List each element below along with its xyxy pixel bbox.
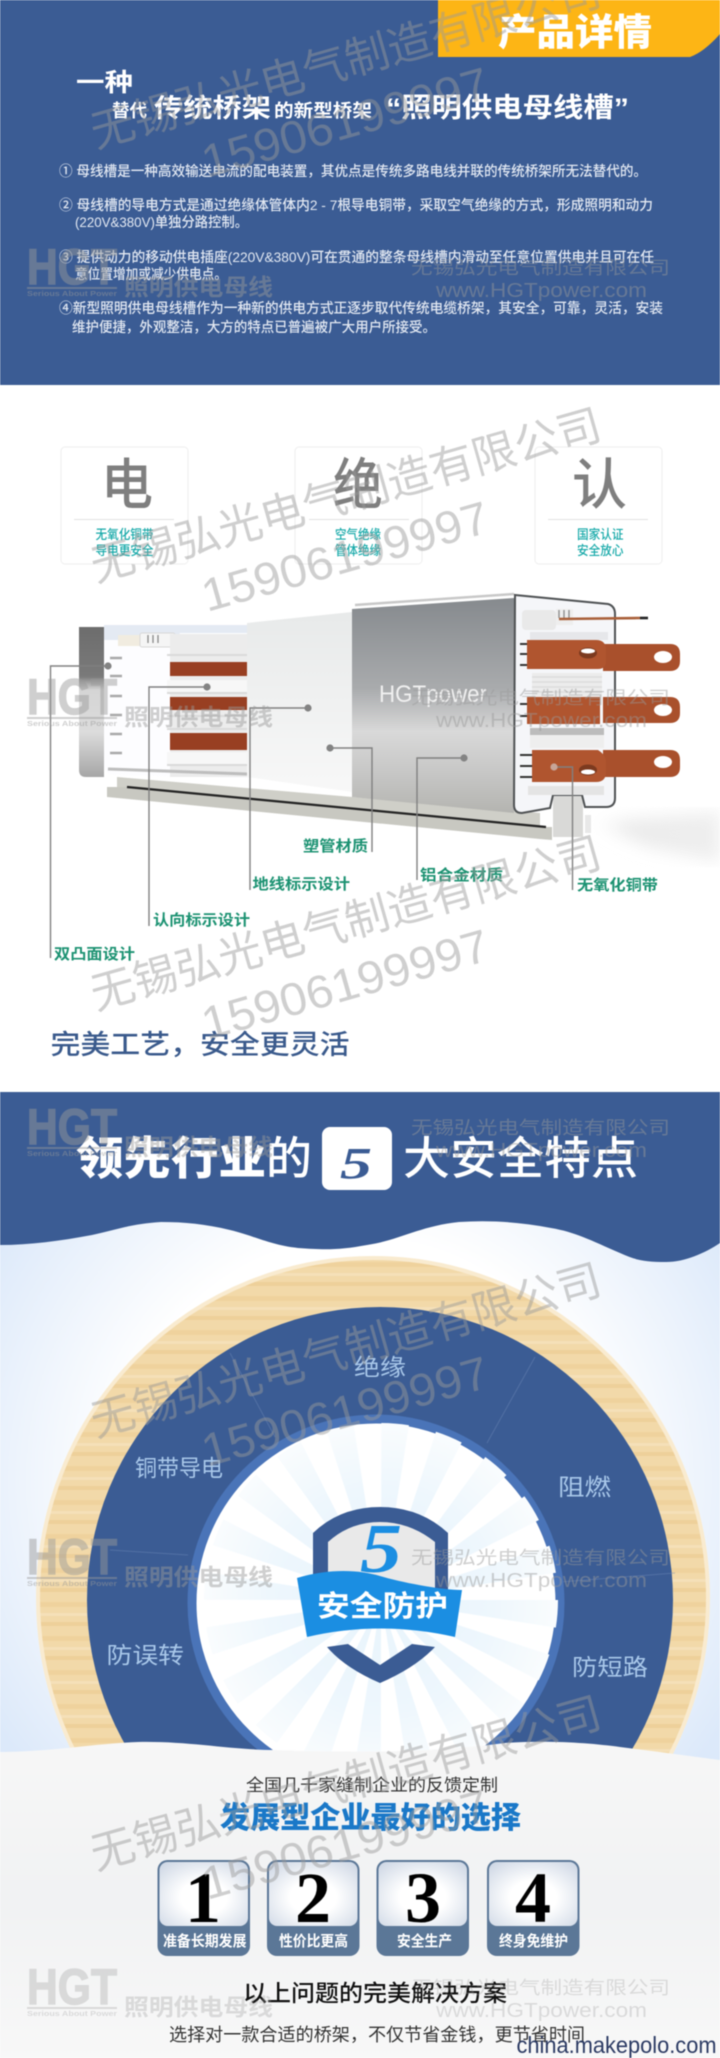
watermark: logo row 1 xyxy=(27,239,670,302)
watermark: logo row 2: www.HGTpower.com xyxy=(435,710,647,732)
title xyxy=(76,69,629,123)
title: 的新型桥架 xyxy=(274,100,372,121)
card: insulation xyxy=(295,447,422,564)
watermark: logo row 5: 无锡弘光电气制造有限公司 xyxy=(411,1978,670,1998)
aluminium housing xyxy=(352,594,514,813)
icon: shield: 5 xyxy=(360,1511,402,1588)
callouts: 认向标示设计 xyxy=(153,912,250,929)
title: 一种 xyxy=(76,69,133,97)
icon: shield: 安全防护 xyxy=(317,1590,448,1623)
callouts: 塑管材质 xyxy=(303,837,368,855)
number card 3: 3 xyxy=(405,1858,441,1938)
callouts xyxy=(50,662,658,963)
text block: product description: ① 母线槽是一种高效输送电流的配电装置，其优点是传统多路电线并联的传统桥架所无法替代的。 xyxy=(59,163,647,179)
number card 3: 安全生产 xyxy=(397,1932,452,1950)
watermark: logo row 4: 照明供电母线 xyxy=(124,1564,273,1590)
watermark: logo row 1: Serious About Power xyxy=(27,289,117,298)
number card 4: 4 xyxy=(515,1858,551,1938)
icon: shield xyxy=(297,1507,462,1683)
number card 2: 2 xyxy=(295,1858,331,1938)
card: copper xyxy=(61,447,188,564)
watermark: logo row 3 xyxy=(27,1099,670,1162)
brand on housing: HGTpower xyxy=(379,681,487,708)
segment labels: 绝缘 xyxy=(354,1354,406,1380)
segment labels: 防短路 xyxy=(572,1654,648,1680)
watermark: logo row 1: HGT xyxy=(27,239,117,295)
inner light ring xyxy=(192,1419,560,1787)
panel: blue header with wave xyxy=(0,1092,720,1262)
watermark: logo row 3: 照明供电母线 xyxy=(124,1134,273,1160)
watermark: logo row 5: www.HGTpower.com xyxy=(435,2000,647,2022)
heading: best choice: 发展型企业最好的选择 xyxy=(220,1802,521,1835)
watermark: diagonal set 5: 15906199997 xyxy=(196,1779,495,1910)
blue ring xyxy=(87,1307,673,1893)
card: insulation: 绝 xyxy=(333,454,383,516)
panel: sky background xyxy=(0,1220,720,1780)
watermark: logo row 2 xyxy=(27,669,670,732)
watermark: logo row 2: 照明供电母线 xyxy=(124,704,273,730)
watermark: logo row 3: Serious About Power xyxy=(27,1149,117,1158)
subtitle: 全国几千家缝制企业的反馈定制 xyxy=(246,1776,498,1795)
watermark: logo row 5: 照明供电母线 xyxy=(124,1994,273,2020)
card: insulation: 管体绝缘 xyxy=(335,543,381,558)
number card 2: 性价比更高 xyxy=(279,1932,348,1950)
number card 2 xyxy=(267,1858,360,1956)
watermark: logo row 3: www.HGTpower.com xyxy=(435,1140,647,1162)
plastic housing xyxy=(247,612,352,792)
small wire xyxy=(559,618,648,619)
watermark: logo row 3: HGT xyxy=(27,1099,117,1155)
callouts: 地线标示设计 xyxy=(252,875,350,893)
watermark: logo row 5 xyxy=(27,1959,670,2022)
text block: product description: ② 母线槽的导电方式是通过绝缘体管体内2 - 7根导电铜带，采取空气绝缘的方式，形成照明和动力 xyxy=(59,197,653,213)
heading: five safety features xyxy=(76,1127,638,1190)
watermark: diagonal set 3: 无锡弘光电气制造有限公司 xyxy=(85,829,607,1020)
watermark: logo row 3: 无锡弘光电气制造有限公司 xyxy=(411,1118,670,1138)
tab holes xyxy=(579,648,672,776)
text block: product description: ④新型照明供电母线槽作为一种新的供电方式正逐步取代传统电缆桥架，其安全，可靠，灵活，安装 xyxy=(59,300,663,316)
watermark: diagonal set 4: 15906199997 xyxy=(196,1346,495,1477)
watermark: diagonal set 2: 无锡弘光电气制造有限公司 xyxy=(85,401,607,592)
heading: five safety features: 大安全特点 xyxy=(403,1133,638,1184)
rail xyxy=(107,777,591,840)
watermark: logo row 4: Serious About Power xyxy=(27,1579,117,1588)
title: 传统桥架 xyxy=(154,93,271,123)
watermark: logo row 1: 照明供电母线 xyxy=(124,274,273,300)
text block: closing line: 选择对一款合适的桥架，不仅节省金钱，更节省时间 xyxy=(169,2025,585,2045)
shadow xyxy=(590,812,720,862)
card: copper: 无氧化铜带 xyxy=(96,527,154,542)
watermark: diagonal set 5: 无锡弘光电气制造有限公司 xyxy=(85,1689,607,1880)
heading: five safety features: 领先行业 xyxy=(76,1133,266,1184)
segment labels xyxy=(106,1354,648,1680)
text block: product description: 维护便捷，外观整洁，大方的特点已普遍被广大用户所接受。 xyxy=(72,319,436,335)
text block: product description xyxy=(59,163,663,335)
callouts: 无氧化铜带 xyxy=(577,876,658,894)
card: certification xyxy=(535,447,662,564)
watermark: logo row 2: HGT xyxy=(27,669,117,725)
watermark: diagonal set 2: 15906199997 xyxy=(196,491,495,622)
product detail tab xyxy=(438,0,720,57)
text block: product description: 意位置增加或减少供电点。 xyxy=(75,266,227,282)
watermark: logo row 1: 无锡弘光电气制造有限公司 xyxy=(411,258,670,278)
diagram: safety wheel xyxy=(38,1258,708,1938)
card: certification: 安全放心 xyxy=(577,543,624,558)
watermark: diagonal set 1: 15906199997 xyxy=(196,57,495,188)
segment labels: 铜带导电 xyxy=(135,1455,223,1481)
card: certification: 国家认证 xyxy=(577,527,624,542)
number card 4: 终身免维护 xyxy=(499,1932,568,1950)
panel: lower section xyxy=(0,1742,720,2058)
callouts: 双凸面设计 xyxy=(54,946,135,963)
title: 替代 xyxy=(112,101,147,121)
text block: product description: ③ 提供动力的移动供电插座(220V&380V)可在贯通的整条母线槽内滑动至任意位置供电并且可在任 xyxy=(59,249,654,265)
product illustration: busbar xyxy=(79,594,720,862)
watermark: logo row 4: HGT xyxy=(27,1529,117,1585)
copper tabs xyxy=(520,640,680,782)
rays xyxy=(292,1511,470,1689)
watermark: logo row 4: www.HGTpower.com xyxy=(435,1570,647,1592)
title: “照明供电母线槽” xyxy=(386,93,629,123)
segment labels: 防误转 xyxy=(106,1642,184,1668)
card: copper: 导电更安全 xyxy=(96,543,154,558)
card: insulation: 空气绝缘 xyxy=(335,527,381,542)
panel: intro background xyxy=(0,0,720,385)
watermark: logo row 5: HGT xyxy=(27,1959,117,2015)
number card 1 xyxy=(158,1858,250,1956)
watermark: logo row 2: Serious About Power xyxy=(27,719,117,728)
number card 1: 准备长期发展 xyxy=(163,1932,246,1950)
product detail tab: 产品详情 xyxy=(498,12,652,53)
watermark: logo row 4: 无锡弘光电气制造有限公司 xyxy=(411,1548,670,1568)
card: copper: 电 xyxy=(101,454,153,516)
watermark: logo row 5: Serious About Power xyxy=(27,2009,117,2018)
heading: five safety features: 5 xyxy=(340,1139,372,1188)
panel: feature cards xyxy=(61,447,662,564)
segment labels: 阻燃 xyxy=(558,1474,611,1500)
wood ring xyxy=(38,1258,708,1938)
heading: perfect craft: 完美工艺，安全更灵活 xyxy=(50,1030,350,1060)
end face xyxy=(514,595,615,813)
watermark: logo row 2: 无锡弘光电气制造有限公司 xyxy=(411,688,670,708)
number card 3 xyxy=(376,1858,469,1956)
text block: product description: (220V&380V)单独分路控制。 xyxy=(75,214,248,230)
callouts: 铝合金材质 xyxy=(420,866,503,884)
watermark: logo row 4 xyxy=(27,1529,670,1592)
number card 4 xyxy=(487,1858,580,1956)
card: certification: 认 xyxy=(572,454,627,516)
heading: solution: 以上问题的完美解决方案 xyxy=(243,1980,507,2006)
left housing xyxy=(79,625,250,778)
heading: five safety features: 的 xyxy=(266,1133,312,1184)
watermark: logo row 1: www.HGTpower.com xyxy=(435,280,647,302)
number card 1: 1 xyxy=(185,1858,221,1938)
watermark: diagonal set 4: 无锡弘光电气制造有限公司 xyxy=(85,1256,607,1447)
watermark: diagonal set 3: 15906199997 xyxy=(196,919,495,1050)
